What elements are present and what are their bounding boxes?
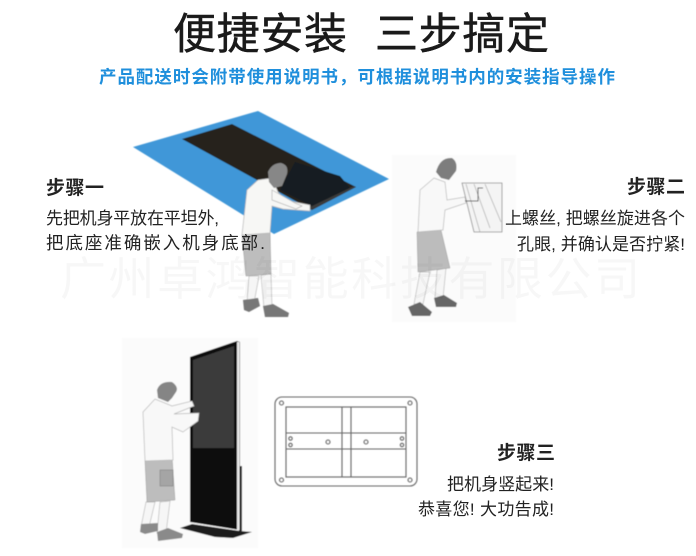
step 1 text: 先把机身平放在平坦外,	[46, 209, 219, 228]
step 1 text	[46, 177, 265, 253]
step 2 text: 步骤二	[627, 176, 685, 198]
watermark: 广州卓鸿智能科技有限公司	[60, 253, 640, 305]
inset panel with hex key	[462, 183, 502, 232]
step 2 text	[505, 176, 685, 254]
person 3	[140, 382, 199, 541]
subtitle: 产品配送时会附带使用说明书，可根据说明书内的安装指导操作	[99, 67, 615, 87]
blue mat	[133, 111, 389, 234]
title: 三步搞定	[375, 11, 549, 59]
monitor	[190, 341, 240, 530]
step 3 text	[418, 442, 555, 519]
person 2	[408, 158, 466, 316]
base	[180, 524, 252, 538]
illustration: step 1 laying the screen flat	[133, 111, 389, 317]
step 1 text: 把底座准确嵌入机身底部.	[46, 233, 265, 253]
step 3 text: 步骤三	[497, 442, 555, 464]
illustration: step 2 fastening screws	[392, 155, 516, 322]
screen lying flat	[182, 124, 356, 210]
step 2 text: 孔眼, 并确认是否拧紧!	[517, 235, 685, 254]
title: 便捷安装	[173, 11, 347, 59]
person 1	[242, 163, 310, 317]
step 3 text: 把机身竖起来!	[447, 475, 554, 494]
step 2 text: 上螺丝, 把螺丝旋进各个	[505, 209, 685, 228]
step 1 text: 步骤一	[46, 177, 104, 199]
title	[173, 11, 549, 59]
rear stand	[239, 466, 242, 531]
step 3 text: 恭喜您! 大功告成!	[418, 500, 554, 519]
illustration: mounting bracket diagram	[275, 397, 417, 486]
illustration: step 3 standing kiosk	[122, 338, 258, 548]
